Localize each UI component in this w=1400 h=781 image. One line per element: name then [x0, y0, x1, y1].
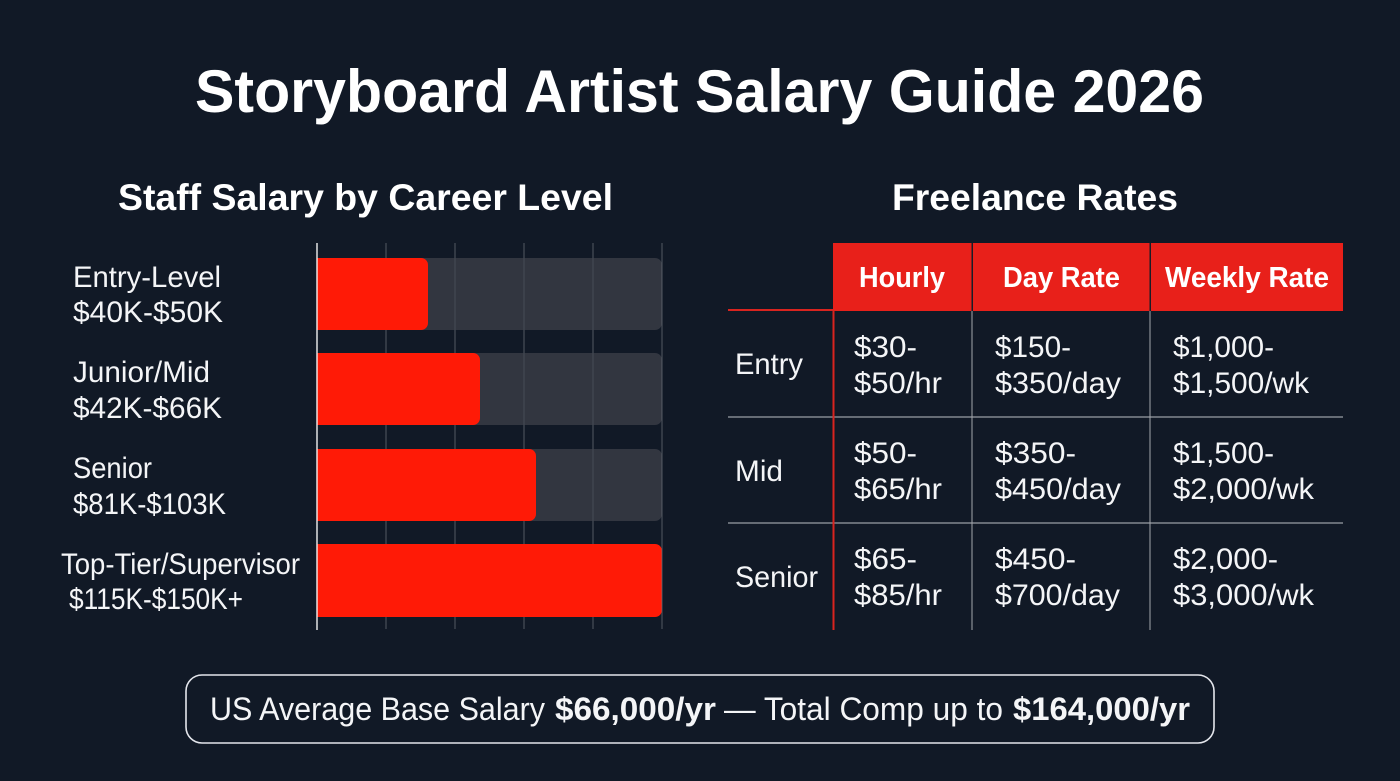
label: senior: $81K-$103K — [73, 488, 226, 521]
label: senior: Senior — [73, 452, 152, 485]
label: entry-level: Entry-Level — [73, 261, 221, 294]
heading: freelance rates: Freelance Rates — [892, 177, 1178, 218]
row: mid: $1,500- — [1173, 437, 1274, 470]
row: senior: $700/day — [995, 579, 1120, 612]
row: senior: $2,000- — [1173, 543, 1278, 576]
callout: us average salary — [186, 675, 1214, 743]
row: entry: $1,000- — [1173, 331, 1274, 364]
row: mid: $450/day — [995, 473, 1121, 506]
row: senior: Senior — [735, 561, 818, 594]
row: senior: $85/hr — [854, 579, 942, 612]
row: mid: $2,000/wk — [1173, 473, 1315, 506]
title: Storyboard Artist Salary Guide 2026 — [195, 58, 1204, 125]
bar: entry-level — [317, 258, 662, 330]
label: junior/mid: $42K-$66K — [73, 392, 222, 425]
bar: top-tier/supervisor — [317, 544, 662, 617]
callout: us average salary: $66,000/yr — [555, 691, 716, 727]
row: senior: $3,000/wk — [1173, 579, 1315, 612]
row: entry: $50/hr — [854, 367, 942, 400]
row: senior — [735, 543, 1315, 612]
table header: Hourly — [859, 262, 945, 294]
row: senior: $65- — [854, 543, 917, 576]
label: junior/mid — [73, 356, 222, 425]
callout: us average salary: US Average Base Salary — [210, 691, 545, 727]
label: senior — [73, 452, 226, 521]
row: mid: $50- — [854, 437, 917, 470]
row: senior: $450- — [995, 543, 1076, 576]
chart axis — [316, 243, 318, 630]
label: top-tier/supervisor — [61, 548, 300, 616]
table header — [833, 243, 1343, 311]
bar: junior/mid — [317, 353, 662, 425]
row: entry: $350/day — [995, 367, 1121, 400]
row: entry — [735, 331, 1310, 400]
row: entry: Entry — [735, 348, 803, 381]
row: mid: $350- — [995, 437, 1076, 470]
label: top-tier/supervisor: $115K-$150K+ — [69, 583, 243, 616]
panel: staff salary bar chart — [61, 243, 662, 630]
label: entry-level: $40K-$50K — [73, 296, 223, 329]
row: mid: $65/hr — [854, 473, 942, 506]
panel: freelance rates table — [728, 243, 1343, 630]
row: entry: $30- — [854, 331, 917, 364]
row: mid — [735, 437, 1315, 506]
row: entry: $1,500/wk — [1173, 367, 1310, 400]
row: mid: Mid — [735, 455, 783, 488]
table header: Day Rate — [1003, 262, 1120, 294]
callout: us average salary: — Total Comp up to — [724, 691, 1003, 727]
label: top-tier/supervisor: Top-Tier/Supervisor — [61, 548, 300, 581]
row: entry: $150- — [995, 331, 1071, 364]
table header: Weekly Rate — [1165, 262, 1329, 294]
heading: staff salary: Staff Salary by Career Level — [118, 177, 613, 218]
label: junior/mid: Junior/Mid — [73, 356, 210, 389]
callout: us average salary: $164,000/yr — [1013, 691, 1190, 727]
label: entry-level — [73, 261, 223, 329]
bar: senior — [317, 449, 662, 521]
